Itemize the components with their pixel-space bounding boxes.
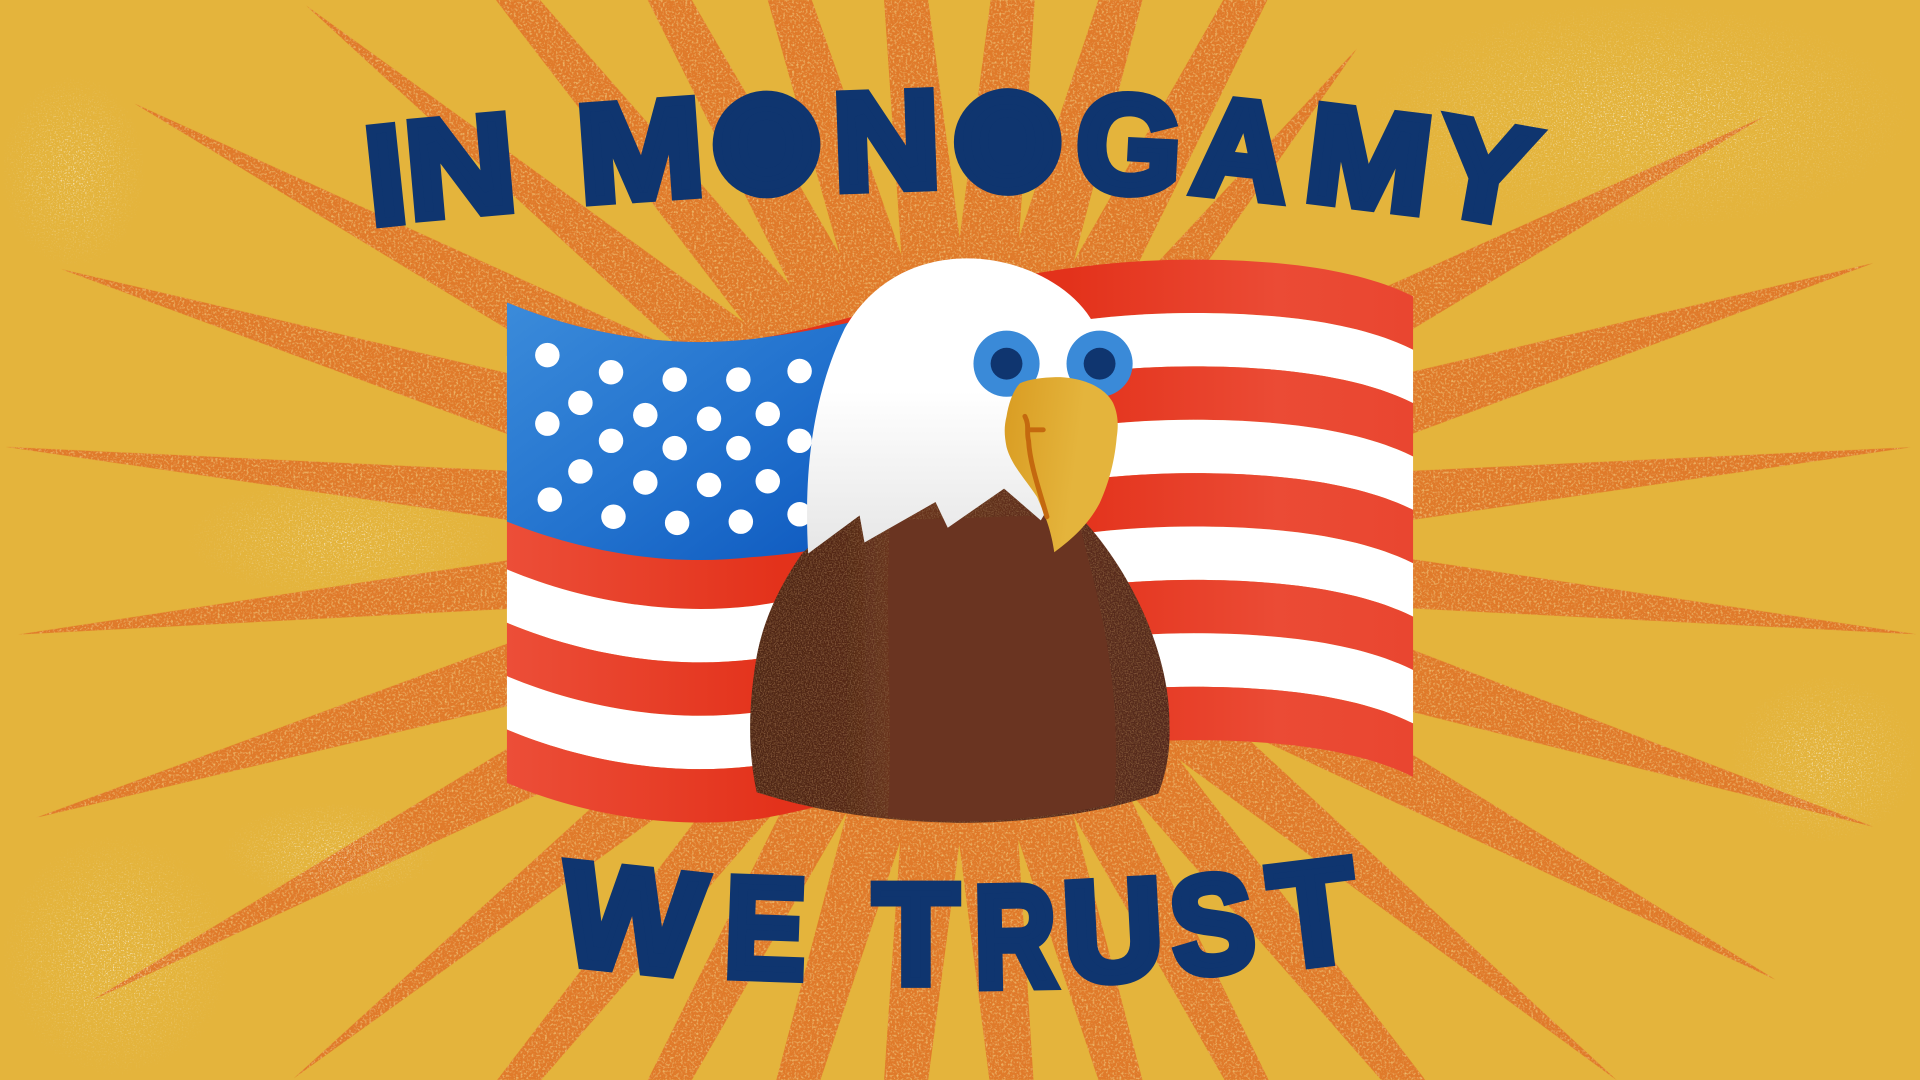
title: WE TRUST: W xyxy=(554,832,710,1007)
eagle body xyxy=(750,478,1170,823)
title: IN MONOGAMY: M xyxy=(1298,76,1439,243)
title: IN MONOGAMY: G xyxy=(1073,65,1185,224)
title: IN MONOGAMY: I xyxy=(359,98,413,254)
american flag xyxy=(507,260,1413,823)
title: IN MONOGAMY: Y xyxy=(1425,88,1546,255)
title: IN MONOGAMY: M xyxy=(572,69,708,231)
title: IN MONOGAMY: O xyxy=(962,76,1053,207)
flag stars xyxy=(535,343,812,535)
flag stripes xyxy=(507,260,1413,823)
left eye xyxy=(973,331,1040,397)
right eye xyxy=(1067,331,1133,397)
title: IN MONOGAMY: A xyxy=(1187,69,1296,231)
title: WE TRUST xyxy=(554,828,1365,1018)
title: IN MONOGAMY: N xyxy=(830,63,943,220)
bald eagle xyxy=(750,258,1170,823)
beak xyxy=(1005,377,1118,552)
title: IN MONOGAMY: N xyxy=(399,85,521,248)
title: IN MONOGAMY xyxy=(359,63,1546,255)
flag canton xyxy=(507,302,862,560)
title: WE TRUST: T xyxy=(874,855,958,1013)
title: IN MONOGAMY: O xyxy=(721,79,812,210)
title: WE TRUST: R xyxy=(973,857,1057,1018)
eagle head xyxy=(807,258,1109,553)
title: WE TRUST: U xyxy=(1059,849,1167,1012)
title: WE TRUST: T xyxy=(1262,828,1365,998)
title: WE TRUST: E xyxy=(722,847,808,1008)
title: WE TRUST: S xyxy=(1163,844,1261,1005)
